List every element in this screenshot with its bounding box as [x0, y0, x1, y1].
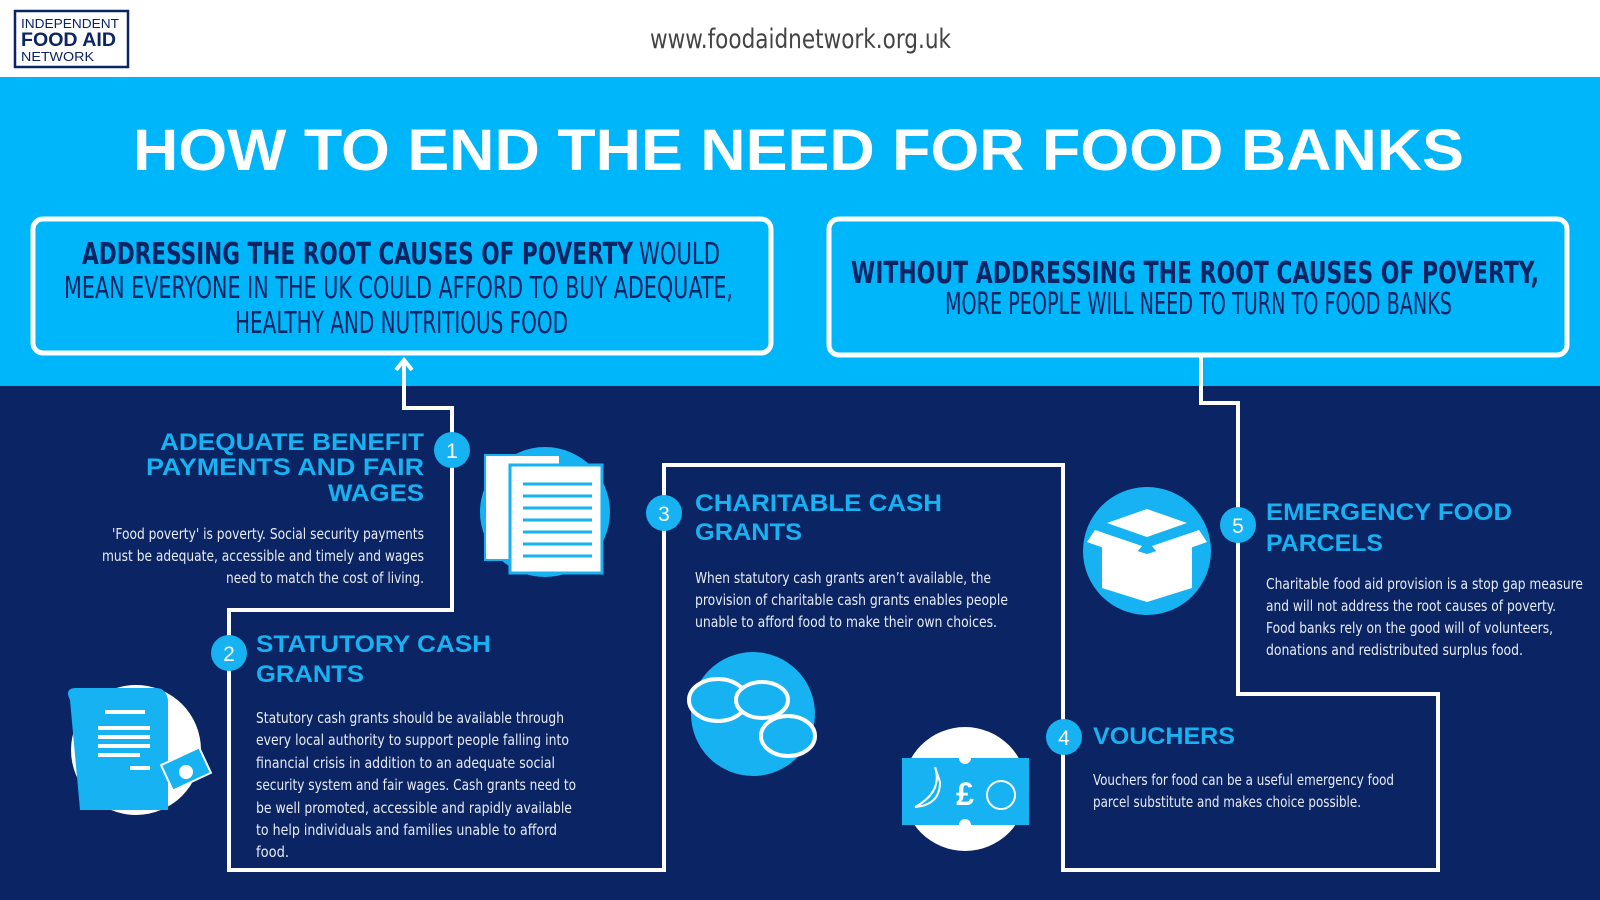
step 1: PAYMENTS AND FAIR	[146, 454, 424, 481]
step 1: 'Food poverty' is poverty. Social security payments	[112, 525, 424, 543]
icon: receipt and cash	[68, 685, 211, 815]
callout: addressing root causes: WOULD	[639, 237, 720, 272]
step 4	[1046, 719, 1394, 811]
logo: FOOD AID	[21, 30, 116, 51]
step 4: VOUCHERS	[1093, 723, 1235, 750]
url: www.foodaidnetwork.org.uk	[650, 24, 951, 55]
step 1: WAGES	[328, 480, 424, 507]
step 2: security system and fair wages. Cash grants need to	[256, 776, 576, 794]
step 1: need to match the cost of living.	[226, 569, 424, 587]
step 2: financial crisis in addition to an adequate social	[256, 754, 555, 772]
icon: documents	[480, 447, 610, 577]
step 4: Vouchers for food can be a useful emergency food	[1093, 771, 1394, 789]
step 5: donations and redistributed surplus food.	[1266, 641, 1523, 659]
logo: INDEPENDENT	[21, 16, 119, 31]
step 3: 3	[658, 503, 670, 526]
step 5: and will not address the root causes of poverty.	[1266, 597, 1556, 615]
step 2: every local authority to support people falling into	[256, 731, 569, 749]
logo: NETWORK	[21, 49, 94, 64]
step 5	[1220, 499, 1583, 659]
step 1	[102, 429, 470, 587]
callout: addressing root causes: ADDRESSING THE ROOT CAUSES OF POVERTY	[82, 237, 633, 272]
step 5: Food banks rely on the good will of volunteers,	[1266, 619, 1553, 637]
callout: addressing root causes: MEAN EVERYONE IN THE UK COULD AFFORD TO BUY ADEQUATE,	[64, 271, 733, 306]
arrow: path connector	[229, 357, 1438, 870]
step 2: Statutory cash grants should be available through	[256, 709, 564, 727]
logo	[15, 11, 128, 67]
icon: coins	[689, 652, 815, 776]
callout: addressing root causes: HEALTHY AND NUTRITIOUS FOOD	[235, 306, 568, 341]
icon: box	[1083, 487, 1211, 615]
callout: addressing root causes	[33, 219, 771, 353]
step 1: ADEQUATE BENEFIT	[160, 429, 424, 456]
step 2: be well promoted, accessible and rapidly available	[256, 799, 572, 817]
step 2: to help individuals and families unable to afford	[256, 821, 557, 839]
callout: without addressing	[829, 219, 1567, 355]
step 1: 1	[446, 440, 458, 463]
step 1: must be adequate, accessible and timely and wages	[102, 547, 424, 565]
step 4: parcel substitute and makes choice possible.	[1093, 793, 1361, 811]
step 3: When statutory cash grants aren’t available, the	[695, 569, 991, 587]
step 3: provision of charitable cash grants enables people	[695, 591, 1008, 609]
step 5: 5	[1232, 515, 1244, 538]
step 4: 4	[1058, 727, 1070, 750]
step 3: unable to afford food to make their own choices.	[695, 613, 997, 631]
step 5: PARCELS	[1266, 530, 1383, 557]
title: HOW TO END THE NEED FOR FOOD BANKS	[133, 118, 1464, 183]
step 3: GRANTS	[695, 519, 802, 546]
step 3	[646, 490, 1008, 631]
step 2: STATUTORY CASH	[256, 631, 491, 658]
step 2: food.	[256, 843, 289, 861]
step 5: EMERGENCY FOOD	[1266, 499, 1512, 526]
step 2: 2	[223, 643, 235, 666]
icon: voucher: £	[956, 776, 974, 812]
icon: voucher	[902, 727, 1029, 851]
step 3: CHARITABLE CASH	[695, 490, 942, 517]
step 2	[211, 631, 576, 861]
step 2: GRANTS	[256, 661, 364, 688]
